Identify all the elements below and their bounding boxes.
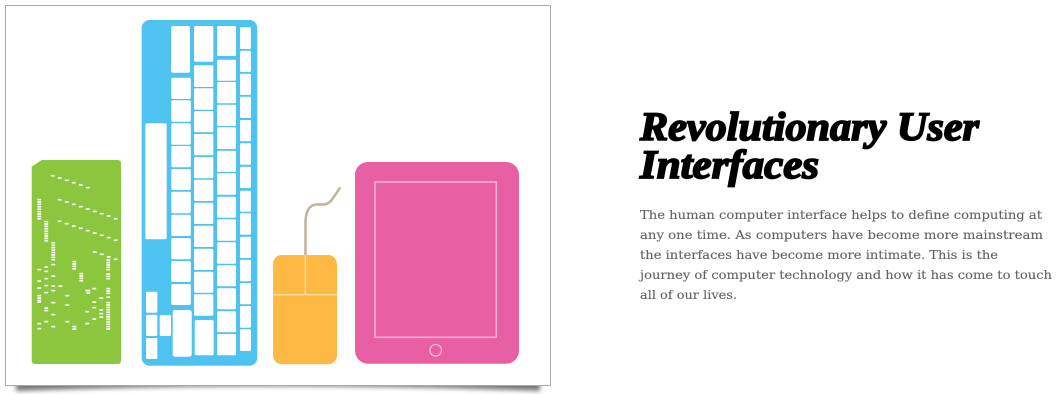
body text: journey of computer technology and how it has come to touch (638, 267, 1052, 282)
key column 3 (217, 26, 236, 355)
mouse cord (306, 187, 340, 256)
body text: any one time. As computers have become more mainstream (640, 227, 1043, 242)
tablet home button (430, 344, 442, 356)
key column 2 (194, 26, 214, 355)
body text: all of our lives. (640, 287, 737, 302)
key column 4 (240, 27, 251, 351)
key column 1 (171, 26, 192, 357)
title (639, 104, 979, 187)
body text (638, 207, 1052, 302)
tablet screen (375, 182, 496, 337)
body text: The human computer interface helps to define computing at (640, 207, 1042, 222)
small keys (146, 292, 171, 359)
title: Revolutionary User (639, 104, 979, 149)
icon: orange mouse (273, 187, 340, 364)
icon: pink tablet (355, 162, 519, 364)
icon: blue keyboard (142, 20, 257, 366)
illustration panel (6, 6, 550, 391)
space bar (145, 123, 167, 239)
panel shadow (16, 380, 540, 391)
icon: green punch card (32, 160, 121, 364)
body text: the interfaces have become more intimate. This is the (640, 247, 998, 262)
title: Interfaces (639, 142, 819, 187)
panel frame (6, 6, 550, 386)
